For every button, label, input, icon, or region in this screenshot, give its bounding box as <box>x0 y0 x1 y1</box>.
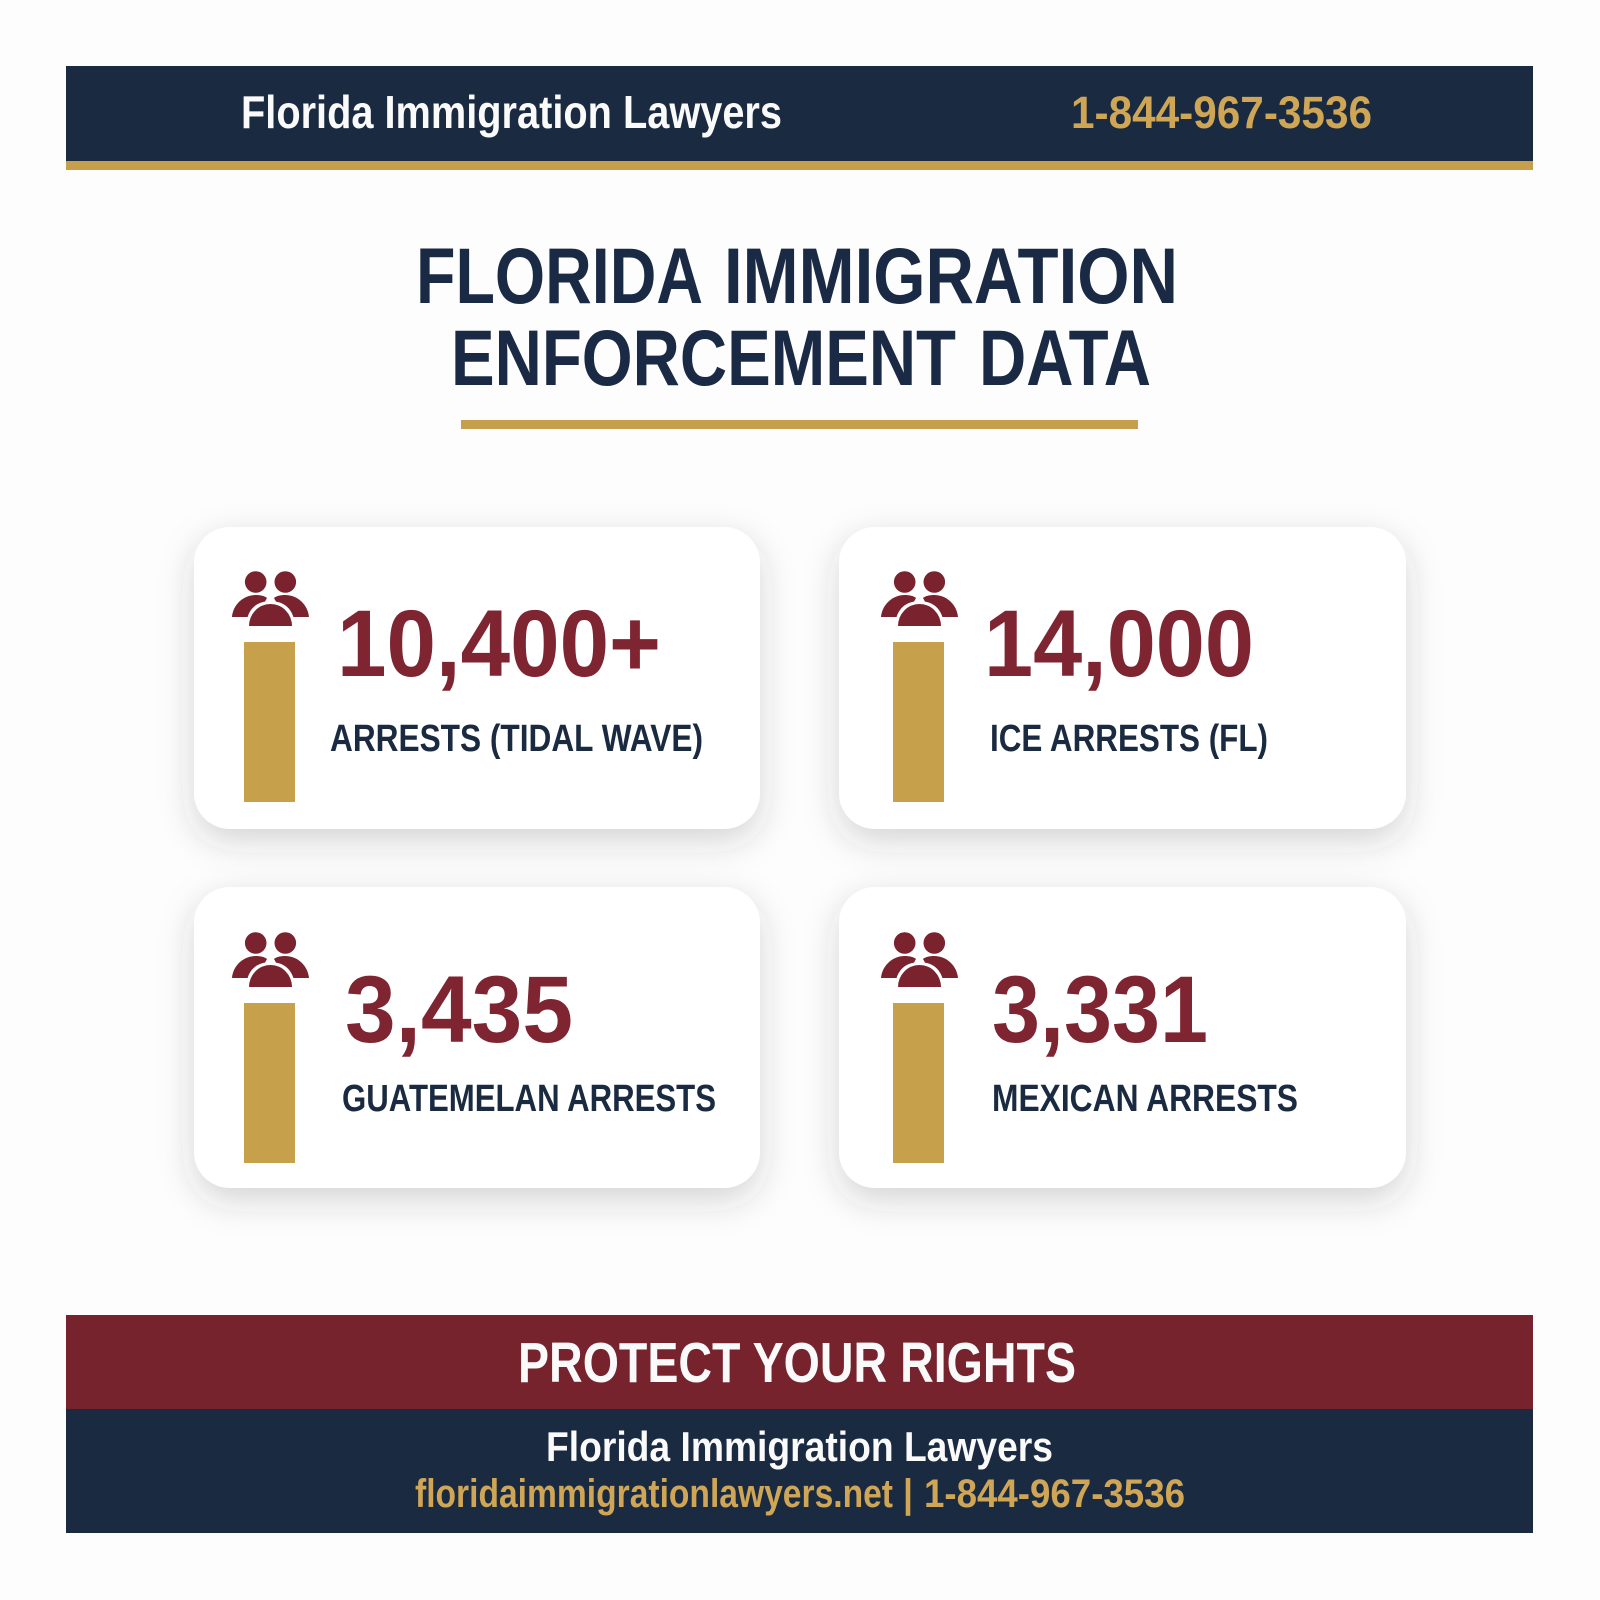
stat value: 3,331 <box>992 957 1208 1063</box>
footer website and phone: | <box>903 1472 913 1516</box>
stat value: 10,400+ <box>337 591 661 697</box>
footer website and phone: 1-844-967-3536 <box>924 1472 1185 1516</box>
title <box>416 231 1178 402</box>
header bar <box>66 66 1533 170</box>
gold bar <box>244 1003 295 1163</box>
footer firm name: Florida Immigration Lawyers <box>546 1423 1053 1470</box>
stat label: ICE ARRESTS (FL) <box>990 718 1268 760</box>
gold bar <box>244 642 295 802</box>
stat label: MEXICAN ARRESTS <box>992 1078 1298 1120</box>
gold bar <box>893 642 944 802</box>
title: IMMIGRATION <box>724 231 1178 320</box>
call to action band <box>66 1315 1533 1409</box>
stat label: GUATEMELAN ARRESTS <box>342 1078 716 1120</box>
panel: ice arrests <box>839 527 1406 829</box>
icon: people <box>881 571 958 626</box>
footer bar <box>66 1409 1533 1533</box>
icon: people <box>881 932 958 987</box>
footer website and phone: floridaimmigrationlawyers.net <box>415 1472 893 1516</box>
call to action heading: PROTECT YOUR RIGHTS <box>518 1331 1076 1395</box>
stat label: ARRESTS (TIDAL WAVE) <box>330 718 703 760</box>
icon: people <box>232 571 309 626</box>
header firm name: Florida Immigration Lawyers <box>241 86 782 138</box>
gold bar <box>893 1003 944 1163</box>
icon: people <box>232 932 309 987</box>
panel: arrests tidal wave <box>194 527 760 829</box>
title: DATA <box>979 313 1151 402</box>
stat value: 3,435 <box>345 957 573 1063</box>
header phone number: 1-844-967-3536 <box>1071 87 1372 138</box>
title: FLORIDA <box>416 231 703 320</box>
title: ENFORCEMENT <box>451 313 956 402</box>
stat value: 14,000 <box>984 591 1254 697</box>
title underline <box>461 420 1138 429</box>
panel: mexican arrests <box>839 887 1406 1188</box>
panel: guatemelan arrests <box>194 887 760 1188</box>
